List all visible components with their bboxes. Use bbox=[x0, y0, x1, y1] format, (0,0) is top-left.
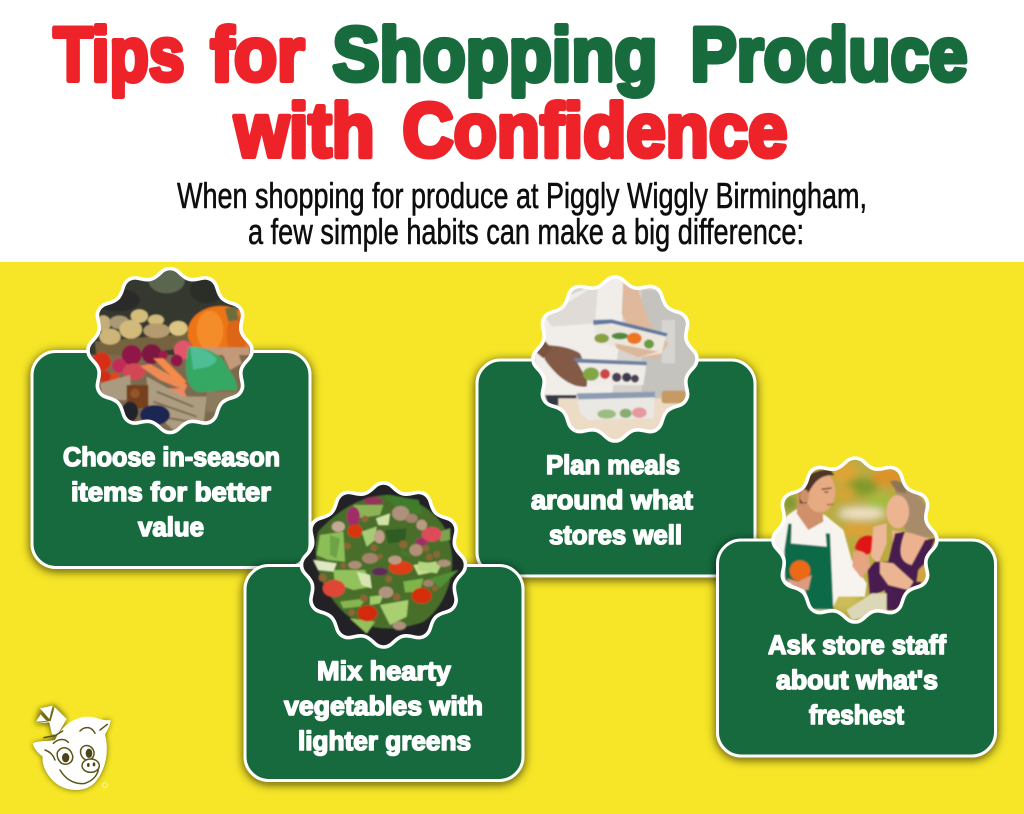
card text: vegetables with bbox=[284, 691, 483, 721]
title: for bbox=[210, 12, 304, 98]
card text: Choose in-season bbox=[63, 442, 280, 472]
card text: value bbox=[138, 512, 204, 542]
logo: pig mascot bbox=[33, 705, 111, 790]
subtitle bbox=[177, 175, 867, 252]
panel: choose in-season items bbox=[32, 260, 310, 568]
title: with bbox=[234, 88, 374, 174]
card text: lighter greens bbox=[298, 726, 471, 756]
card text bbox=[63, 442, 280, 542]
card text: about what's bbox=[776, 665, 938, 695]
title bbox=[54, 12, 968, 174]
title: Shopping bbox=[332, 12, 658, 98]
white header background bbox=[0, 0, 1024, 262]
panel: ask store staff bbox=[718, 450, 996, 756]
card text: freshest bbox=[809, 700, 904, 730]
card text bbox=[531, 450, 693, 550]
title: Tips bbox=[54, 12, 184, 98]
card text: Ask store staff bbox=[768, 630, 947, 660]
photo badge: staff and shopper bbox=[771, 456, 939, 624]
title: Confidence bbox=[402, 88, 788, 174]
card text bbox=[284, 656, 483, 756]
card text: stores well bbox=[549, 520, 682, 550]
subtitle: a few simple habits can make a big difference: bbox=[248, 211, 804, 252]
card text: Mix hearty bbox=[317, 656, 451, 686]
card text: items for better bbox=[71, 477, 271, 507]
panel: plan meals bbox=[477, 270, 755, 576]
photo badge: storage containers bbox=[531, 275, 699, 443]
yellow background panel bbox=[0, 262, 1024, 814]
card text bbox=[768, 630, 947, 730]
title: Produce bbox=[690, 12, 968, 98]
panel: mix vegetables bbox=[245, 475, 523, 780]
photo badge: salad bbox=[300, 481, 468, 649]
card text: Plan meals bbox=[546, 450, 680, 480]
card text: around what bbox=[531, 485, 693, 515]
photo badge: produce baskets bbox=[86, 266, 254, 434]
